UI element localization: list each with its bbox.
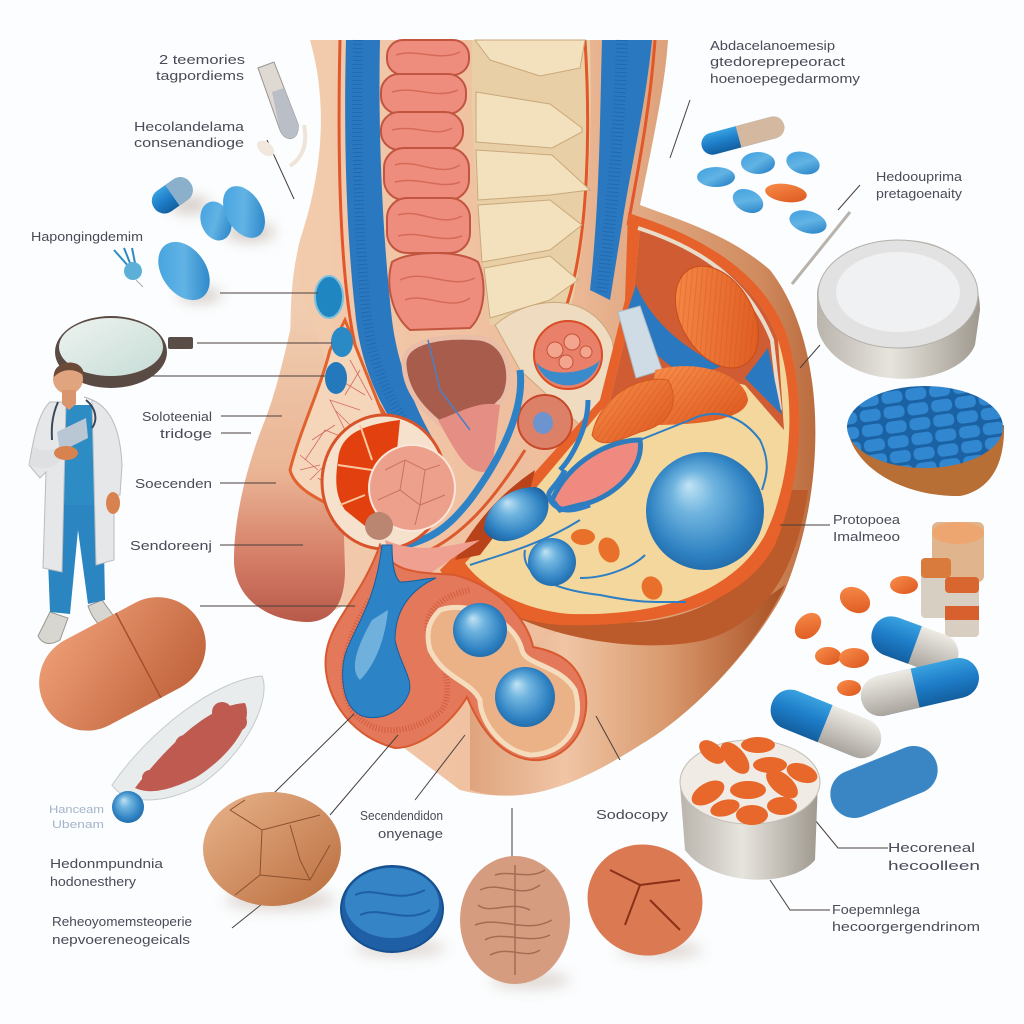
label: protopoea: Imalmeoo: [833, 529, 900, 544]
pink gland sphere: [369, 445, 455, 531]
label: foepemnlega: Foepemnlega: [832, 902, 921, 917]
anatomical cross-section: [234, 40, 815, 796]
capsule b: [857, 654, 983, 720]
label: soecenden: Soecenden: [135, 476, 212, 491]
orange tablets: [687, 735, 820, 825]
neck: [62, 390, 76, 410]
label: hanceam: Hanceam: [49, 804, 104, 816]
label: foepemnlega: hecoorgergendrinom: [832, 919, 980, 934]
tan pouch lining: [428, 607, 578, 755]
colon: [381, 40, 484, 330]
small blue node 1: [315, 276, 343, 318]
pill b: [784, 148, 822, 178]
clear vial: [618, 306, 662, 378]
icon: blue pills left cluster: [147, 173, 275, 310]
label: abdacelanoemesip: gtedoreprepeoract: [710, 54, 845, 69]
label: hedonmpundnia: Hedonmpundnia: [50, 856, 164, 871]
red vessels bundle: [430, 450, 525, 550]
hair: [54, 363, 84, 377]
pouch striations: [344, 590, 470, 730]
label: sodocopy: Sodocopy: [596, 807, 669, 822]
pill oval: [148, 232, 220, 310]
top right pills: [697, 114, 850, 284]
head: [53, 364, 83, 394]
band ribbing right: [602, 40, 622, 292]
large blue sphere: [646, 452, 764, 570]
doctor illustration: [29, 363, 122, 643]
pill large: [214, 179, 274, 245]
label: soloteenial: Soloteenial: [142, 409, 212, 424]
small blue sphere: [528, 538, 576, 586]
cracked red egg: [569, 826, 721, 974]
metal lid: [817, 240, 980, 379]
label: hedonmpundnia: hodonesthery: [50, 874, 137, 889]
sleeve across: [29, 446, 62, 468]
label: secendendidon: onyenage: [378, 826, 443, 841]
label: reheoyomemsteoperie: Reheoyomemsteoperie: [52, 914, 192, 929]
label: hecolandelama: consenandioge: [134, 135, 244, 150]
capsule: [699, 114, 787, 157]
large tan capsule: [22, 580, 223, 748]
label: secendendidon: Secendendidon: [360, 808, 443, 823]
icon: test tube: [257, 62, 305, 166]
tan nodule near vertebrae: [534, 321, 602, 389]
label: reheoyomemsteoperie: nepvoereneogeicals: [52, 932, 191, 947]
lower pouch: [326, 545, 586, 760]
blue pouch sphere upper: [453, 603, 507, 657]
brain-like egg: [460, 856, 570, 984]
pill small: [195, 197, 237, 245]
pill d: [729, 184, 767, 218]
pink tissue loop: [552, 440, 640, 510]
blue bean: [484, 487, 548, 541]
tan side tissue: [290, 320, 420, 515]
tray base: [847, 425, 1004, 496]
label: abdacelanoemesip: hoenoepegedarmomy: [710, 71, 861, 86]
label: hecoreneal: Hecoreneal: [888, 840, 975, 855]
stethoscope: [52, 400, 95, 440]
pelvic cavity outer band: [440, 213, 799, 625]
muscle wedge: [455, 470, 535, 560]
bottom specimens: [203, 792, 721, 988]
blue tissue right: [745, 348, 782, 415]
small jars right: [921, 522, 984, 637]
label: top left: tagpordiems: [156, 68, 245, 83]
blue crescent: [536, 360, 600, 385]
orange seeds: [571, 529, 666, 603]
icon: magnifying glass: [55, 316, 193, 388]
capsule a: [866, 611, 964, 679]
bladder chamber: [404, 337, 509, 445]
clipboard: [57, 418, 88, 452]
label: hapongingdemim: Hapongingdemim: [31, 229, 143, 244]
trousers: [48, 500, 105, 614]
blue elongated organ: [343, 545, 436, 718]
blue vessels in cavity: [470, 400, 767, 602]
pink urethra strip: [385, 540, 480, 580]
coat left panel: [29, 402, 66, 572]
spine vertebrae: [475, 40, 614, 425]
capsule bottom-left organ: [22, 580, 264, 823]
scrub top: [60, 405, 96, 505]
label: hecoreneal: hecoolleen: [888, 858, 980, 873]
label: hanceam: Ubenam: [52, 819, 104, 831]
label: sendoreenj: Sendoreenj: [130, 538, 212, 553]
orange pills: [790, 576, 918, 696]
blue tissue upper: [626, 285, 722, 378]
small blue ball: [112, 791, 144, 823]
clear pod: [112, 676, 264, 800]
coat right panel: [84, 397, 122, 565]
label: hecolandelama: Hecolandelama: [134, 119, 245, 134]
capsule c: [765, 684, 887, 764]
pill shadows: [170, 197, 275, 302]
specimen shadows: [225, 890, 702, 988]
cavity upper region: [610, 228, 784, 430]
blue duct: [385, 370, 521, 548]
label: protopoea: Protopoea: [833, 512, 901, 527]
tablets: [847, 386, 1003, 468]
cracked tan egg: [203, 792, 341, 906]
jar front: [945, 577, 979, 637]
band ribbing left: [357, 40, 428, 452]
blue band right: [590, 40, 652, 300]
pill a: [741, 152, 775, 174]
pill c: [697, 167, 735, 187]
label: hedoouprima: Hedoouprima: [876, 169, 963, 184]
small tan nub: [365, 512, 393, 540]
orange pill: [764, 181, 808, 205]
body silhouette: [234, 40, 815, 796]
syringe: [792, 212, 850, 284]
pill e: [787, 206, 829, 238]
blue organ highlight: [355, 610, 388, 680]
label: hedoouprima: pretagoenaity: [876, 186, 963, 201]
right hand: [106, 492, 120, 514]
spine column backing: [472, 40, 591, 325]
blue textured disc: [341, 866, 443, 952]
blue pouch sphere lower: [495, 667, 555, 727]
bladder neck: [438, 404, 500, 472]
small round nodule: [518, 395, 572, 449]
small blue node 3: [325, 362, 347, 394]
tan band inner: [638, 228, 780, 410]
capsule: [147, 173, 197, 218]
tall jar: [932, 522, 984, 582]
jar of orange pills: [680, 735, 820, 880]
pelvic cavity fill: [465, 228, 789, 614]
orange muscle lower: [592, 366, 748, 443]
leader lines: [150, 100, 888, 928]
label: top left: 2 teemories: [159, 52, 246, 67]
veined patch: [300, 360, 372, 490]
left hand: [54, 446, 78, 460]
tray of blue tablets: [847, 386, 1004, 496]
small blue node 2: [331, 327, 353, 357]
icon: small blue bug: [114, 248, 143, 287]
label: abdacelanoemesip: Abdacelanoemesip: [710, 38, 835, 53]
short jar left: [921, 558, 951, 618]
label: soloteenial: tridoge: [160, 426, 212, 441]
orange muscle upper: [658, 251, 776, 383]
red tissue cluster: [135, 702, 247, 791]
red vessel left: [339, 40, 395, 430]
scattered capsules and orange pills: [765, 576, 983, 825]
blue spinal band left: [345, 40, 440, 460]
orange segmented gland: [322, 415, 446, 549]
capsule d: [823, 739, 945, 825]
shoes: [38, 600, 118, 643]
